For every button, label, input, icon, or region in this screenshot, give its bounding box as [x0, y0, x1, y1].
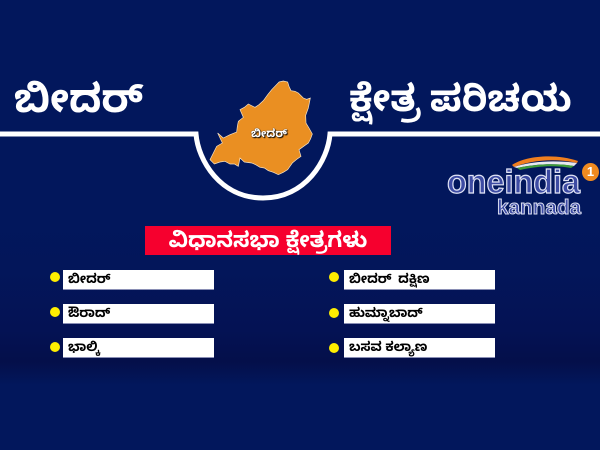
- bullet 4: [329, 272, 339, 282]
- logo wordmark: [447, 163, 582, 219]
- item: Aurad: ಔರಾದ್: [68, 305, 110, 320]
- logo badge: 1: [587, 164, 594, 179]
- item: Basavakalyan: [344, 338, 495, 357]
- heading banner: [145, 226, 391, 255]
- title: right: ಕ್ಷೇತ್ರ ಪರಿಚಯ: [349, 78, 572, 119]
- heading banner: ವಿಧಾನಸಭಾ ಕ್ಷೇತ್ರಗಳು: [169, 228, 367, 252]
- logo wordmark: kannada: [497, 197, 582, 219]
- bullet 5: [329, 308, 339, 318]
- list: right column: [329, 270, 495, 358]
- bullet 6: [329, 343, 339, 353]
- item: Bhalki: [63, 338, 214, 357]
- item: Bidar: [63, 270, 214, 289]
- map: Bidar district: [210, 80, 313, 175]
- title: left: ಬೀದರ್: [14, 77, 143, 121]
- item: Aurad: [63, 304, 214, 323]
- item: Humnabad: ಹುಮ್ನಾಬಾದ್: [349, 305, 423, 320]
- item: Bidar South: ಬೀದರ್ ದಕ್ಷಿಣ: [349, 271, 430, 286]
- bullet 1: [50, 272, 60, 282]
- bullet 3: [50, 342, 60, 352]
- item: Bidar: ಬೀದರ್: [68, 271, 110, 286]
- logo badge: [582, 163, 599, 181]
- item: Bhalki: ಭಾಲ್ಕಿ: [68, 339, 100, 354]
- logo wordmark: oneindia: [447, 163, 581, 200]
- map label: ಬೀದರ್: [251, 128, 287, 140]
- list: left column: [50, 270, 214, 358]
- item: Humnabad: [344, 304, 495, 323]
- logo: oneindia kannada: [447, 156, 599, 219]
- item: Bidar South: [344, 270, 495, 289]
- bullet 2: [50, 307, 60, 317]
- logo swoosh: [512, 156, 578, 170]
- item: Basavakalyan: ಬಸವ ಕಲ್ಯಾಣ: [349, 339, 427, 354]
